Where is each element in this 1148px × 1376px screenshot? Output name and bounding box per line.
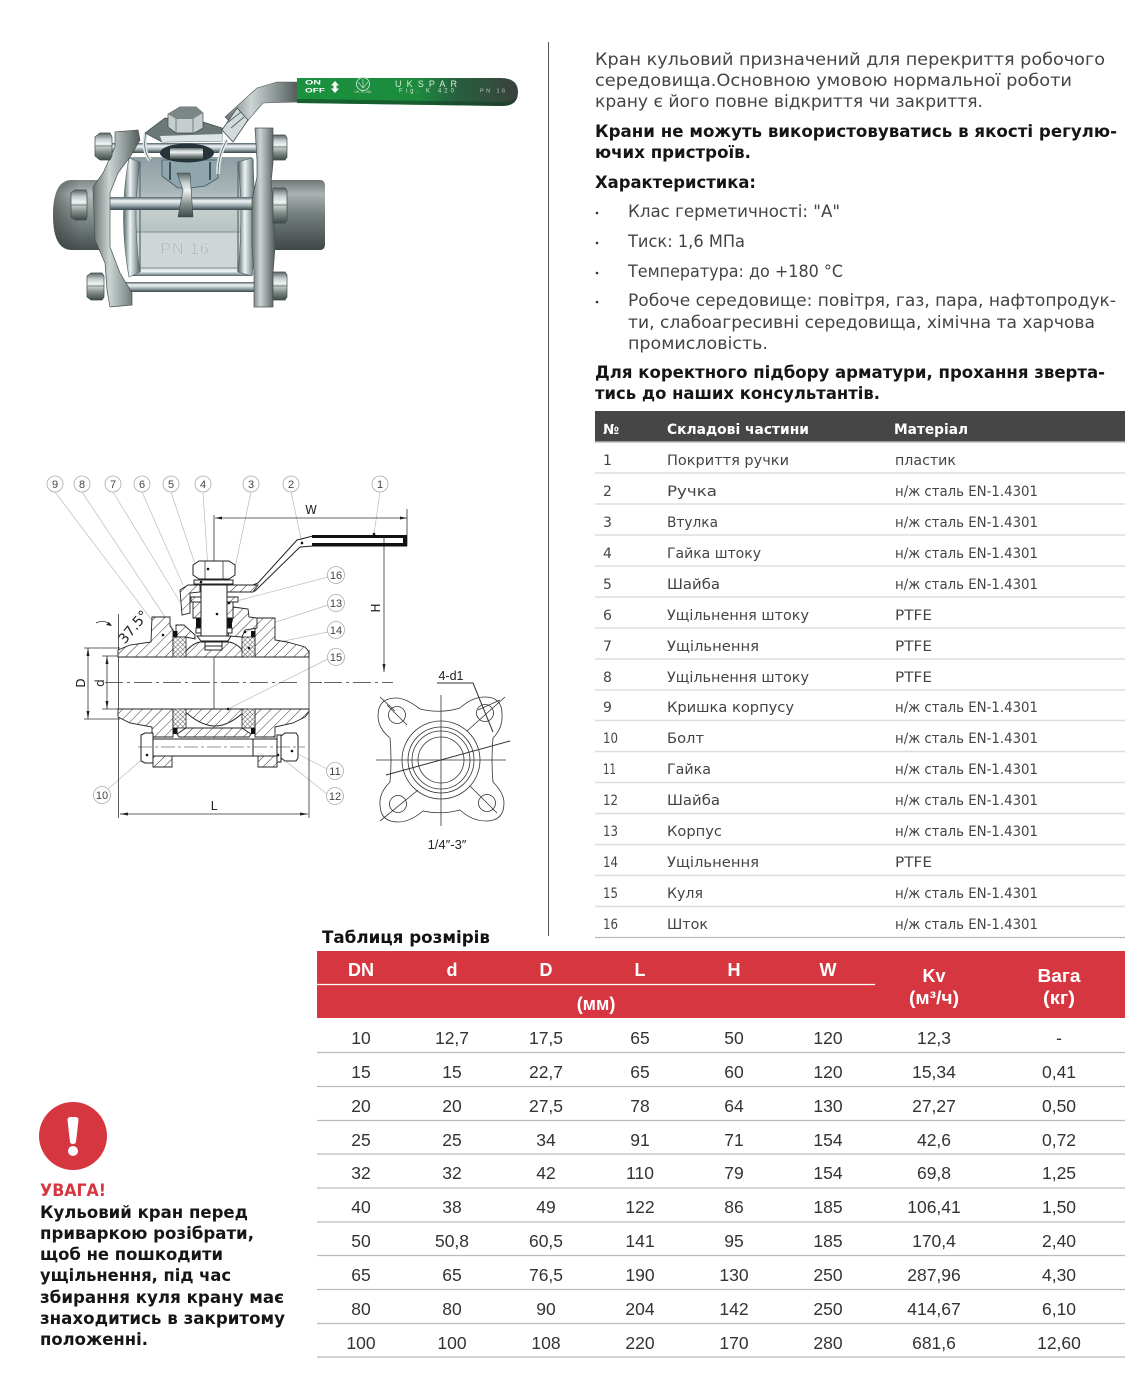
green handle grip [297,78,518,106]
row DN 40: 122 [625,1197,655,1217]
numbered balloons: 9 [52,479,58,491]
size range label: 1/4″-3″ [428,837,467,852]
row DN 15: 60 [724,1062,744,1082]
numbered balloons: 5 [168,479,174,491]
left flange [93,130,140,307]
size table title: Таблиця розмірів [322,928,490,948]
row DN 10: 12,3 [917,1028,951,1048]
body end rings [124,158,140,277]
numbered balloons: 10 [96,790,108,802]
retaining clip [177,173,193,217]
parts rows: 9 [603,700,612,716]
row DN 15 [317,1062,1125,1086]
row DN 10: 17,5 [529,1028,563,1048]
row DN 32: 1,25 [1042,1163,1076,1183]
row DN 25: 0,72 [1042,1130,1076,1150]
dimension arrows [86,516,407,816]
row DN 65: 287,96 [907,1265,961,1285]
numbered balloons: 6 [139,479,145,491]
row DN 50: 170,4 [912,1231,956,1251]
parts rows: 5 [603,577,612,593]
row DN 32: 69,8 [917,1163,951,1183]
row DN 10: 65 [630,1028,650,1048]
row DN 25: 71 [724,1130,744,1150]
row DN 32: 154 [813,1163,843,1183]
row DN 25: 91 [630,1130,650,1150]
parts rows: 10 [603,731,618,747]
green handle grip: OFF [305,88,325,94]
parts rows: Куля [667,886,703,902]
parts rows: н/ж сталь EN-1.4301 [895,762,1038,778]
row DN 25: 25 [351,1130,371,1150]
consultants note [595,363,1105,403]
row DN 25: 42,6 [917,1130,951,1150]
row DN 50: 185 [813,1231,843,1251]
row DN 80: 80 [351,1299,371,1319]
stem nut [168,107,203,133]
row DN 25: 34 [536,1130,556,1150]
row DN 25: 154 [813,1130,843,1150]
dimension labels: 37.5° [116,608,152,647]
size table header: d [446,960,458,980]
row DN 80: 6,10 [1042,1299,1076,1319]
parts rows: н/ж сталь EN-1.4301 [895,546,1038,562]
dimension labels: d [93,679,107,687]
dimension labels [74,503,383,813]
parts rows: 3 [603,515,612,531]
parts table header: Матеріал [894,422,968,438]
row DN 40 [317,1197,1125,1222]
row DN 65: 4,30 [1042,1265,1076,1285]
valve barrel: PN 16 [160,241,210,258]
row DN 10: - [1056,1028,1062,1048]
parts rows: Ущільнення [667,855,759,871]
parts table [595,411,1125,938]
flange end view [376,669,510,852]
parts rows: 16 [603,917,618,933]
parts rows: н/ж сталь EN-1.4301 [895,917,1038,933]
row DN 50: 50 [351,1231,371,1251]
row DN 32: 110 [626,1163,654,1183]
parts rows: Ущільнення штоку [667,608,809,624]
green handle grip: PN 16 [480,88,505,94]
row DN 25: 25 [442,1130,462,1150]
characteristics list: Температура: до +180 °C [627,262,843,282]
size table header: Kv [922,966,946,986]
flange axes [376,683,510,826]
row DN 80: 80 [442,1299,462,1319]
black handle sleeve [312,535,407,546]
parts rows: н/ж сталь EN-1.4301 [895,824,1038,840]
parts rows: н/ж сталь EN-1.4301 [895,793,1038,809]
green handle grip: UKSPAR [395,79,458,89]
row DN 40: 38 [442,1197,462,1217]
row DN 32: 79 [724,1163,744,1183]
parts rows: Болт [667,731,704,747]
row DN 15: 15 [351,1062,371,1082]
parts rows: Кришка корпусу [667,700,794,716]
regulating warning [595,122,1117,162]
row DN 50: 60,5 [529,1231,563,1251]
parts rows: 1 [603,453,612,469]
right pipe end [268,180,325,250]
parts rows: 8 [603,670,612,686]
ball valve product photo [53,78,518,307]
size table header: (мм) [577,994,615,1014]
parts rows: 15 [603,886,618,902]
characteristics list: Клас герметичності: "А" [628,202,840,222]
row DN 50: 95 [724,1231,744,1251]
row DN 80: 142 [719,1299,749,1319]
parts rows: 6 [603,608,612,624]
dimension lines [84,509,407,818]
size table [317,951,1125,1357]
parts rows: PTFE [895,608,932,624]
row DN 50: 141 [625,1231,655,1251]
parts rows: Корпус [667,824,722,840]
technical section drawing [47,476,407,818]
dimension labels: W [305,503,317,517]
regulating warning: ючих пристроїв. [595,143,751,162]
row DN 40: 40 [351,1197,371,1217]
parts rows: PTFE [895,670,932,686]
row DN 100: 100 [346,1333,376,1353]
row DN 20 [317,1096,1125,1120]
characteristics list: ти, слабоагресивні середовища, хімічна та харчова [628,313,1095,333]
valve barrel [128,157,254,276]
row DN 50: 2,40 [1042,1231,1076,1251]
seat packing [173,637,255,728]
warning text: приваркою розібрати, [40,1224,254,1243]
row DN 50: 50,8 [435,1231,469,1251]
flange bore circles [388,704,496,812]
warning text: збирання куля крану має [40,1288,284,1307]
row DN 80: 90 [536,1299,556,1319]
row DN 65: 65 [351,1265,371,1285]
row DN 100: 170 [719,1333,749,1353]
parts rows: 13 [603,824,618,840]
parts rows: Ущільнення штоку [667,670,809,686]
parts rows: н/ж сталь EN-1.4301 [895,886,1038,902]
row DN 15: 15,34 [912,1062,956,1082]
numbered balloons: 3 [248,479,254,491]
consultants note: тись до наших консультантів. [595,384,880,403]
parts rows: Ущільнення [667,639,759,655]
row DN 65: 76,5 [529,1265,563,1285]
row DN 15: 120 [813,1062,843,1082]
row DN 80: 204 [625,1299,655,1319]
warning text: щоб не пошкодити [40,1245,223,1264]
parts rows: 7 [603,639,612,655]
characteristics list: промисловість. [628,334,768,354]
parts rows: Шток [667,917,708,933]
characteristics list: Тиск: 1,6 МПа [627,232,745,252]
size table header: (м³/ч) [909,988,959,1008]
warning text [40,1203,285,1349]
size table header: D [540,960,552,980]
row DN 15: 65 [630,1062,650,1082]
bottom tie rod [118,282,258,292]
intro paragraph: середовища.Основною умовою нормальної роботи [595,71,1072,91]
handle clip [222,108,248,142]
warning text: положенні. [40,1330,148,1349]
row DN 10: 50 [724,1028,744,1048]
parts rows: н/ж сталь EN-1.4301 [895,515,1038,531]
leader dots [146,533,375,756]
hatched body sections [118,585,309,767]
flange outline [378,697,504,822]
numbered balloons: 7 [110,479,116,491]
row DN 20: 20 [351,1096,371,1116]
numbered balloons: 16 [330,570,342,582]
valve neck [162,160,218,188]
numbered balloons [47,476,388,804]
row DN 20: 0,50 [1042,1096,1076,1116]
leader lines [55,492,380,794]
parts rows: н/ж сталь EN-1.4301 [895,731,1038,747]
row DN 65: 130 [719,1265,749,1285]
row DN 65 [317,1265,1125,1290]
parts rows: Гайка штоку [667,546,761,562]
parts rows: Шайба [667,793,720,809]
warning text: знаходитись в закритому [40,1309,285,1328]
parts rows: н/ж сталь EN-1.4301 [895,484,1038,500]
nuts [71,133,287,300]
dimension labels: H [369,603,383,613]
row DN 10: 10 [351,1028,371,1048]
consultants note: Для коректного підбору арматури, прохання зверта- [595,363,1105,382]
locking plate hooks [145,133,227,174]
row DN 10 [317,1028,1125,1052]
row DN 20: 130 [813,1096,843,1116]
green handle grip: Fig. K 420 [399,88,455,94]
size table header: Вага [1038,966,1082,986]
row DN 32 [317,1163,1125,1188]
row DN 32: 32 [351,1163,371,1183]
size table header: DN [348,960,374,980]
numbered balloons: 15 [330,652,342,664]
size table header: W [820,960,836,980]
row DN 15: 15 [442,1062,462,1082]
row DN 40: 106,41 [907,1197,961,1217]
parts rows: 12 [603,793,618,809]
numbered balloons: 2 [288,479,294,491]
row DN 100: 12,60 [1037,1333,1081,1353]
row DN 80: 414,67 [907,1299,961,1319]
parts rows: Ручка [667,484,717,500]
steel handle arm [225,82,298,131]
row DN 10: 120 [813,1028,843,1048]
row DN 15: 22,7 [529,1062,563,1082]
characteristics heading: Характеристика: [595,173,756,192]
warning text: Кульовий кран перед [40,1203,248,1222]
parts table header: № [603,422,619,438]
size table header [317,951,1125,1018]
row DN 10: 12,7 [435,1028,469,1048]
row DN 65: 65 [442,1265,462,1285]
characteristics list [596,202,1116,354]
row DN 65: 250 [813,1265,843,1285]
row DN 40: 1,50 [1042,1197,1076,1217]
parts rows: н/ж сталь EN-1.4301 [895,700,1038,716]
green handle grip: UK.TR.061 [354,90,372,94]
parts rows: пластик [895,453,956,469]
parts rows: Шайба [667,577,720,593]
row DN 100: 280 [813,1333,843,1353]
numbered balloons: 12 [329,791,341,803]
parts rows: 11 [603,762,616,778]
row DN 50 [317,1231,1125,1256]
vertical divider [548,42,550,936]
row DN 32: 32 [442,1163,462,1183]
parts table header: Складові частини [667,422,809,438]
intro paragraph: Кран кульовий призначений для перекриття робочого [595,50,1105,70]
row DN 100: 220 [625,1333,655,1353]
dimension labels: L [211,799,218,813]
warning callout [39,1102,285,1349]
middle tie rod [108,197,256,210]
row DN 80: 250 [813,1299,843,1319]
black O-rings [173,618,256,734]
stem collar [160,144,214,162]
row DN 40: 86 [724,1197,744,1217]
numbered balloons: 4 [200,479,206,491]
row DN 32: 42 [536,1163,556,1183]
numbered balloons: 11 [329,766,341,778]
icon: exclamation mark [39,1102,107,1170]
row DN 25 [317,1130,1125,1154]
right flange [252,128,275,307]
parts rows: Покриття ручки [667,453,789,469]
row DN 20: 64 [724,1096,744,1116]
parts rows: Втулка [667,515,718,531]
parts rows: 2 [603,484,612,500]
handle outline [253,536,313,591]
size table header: H [728,960,740,980]
parts rows: Гайка [667,762,711,778]
parts rows: PTFE [895,639,932,655]
row DN 20: 27,27 [912,1096,956,1116]
parts rows [595,453,1125,938]
parts rows: н/ж сталь EN-1.4301 [895,577,1038,593]
hole callout: 4-d1 [438,669,464,683]
row DN 100 [317,1333,1125,1357]
top tie rod [112,143,278,153]
parts rows: 14 [603,855,618,871]
row DN 40: 49 [536,1197,556,1217]
row DN 20: 27,5 [529,1096,563,1116]
row DN 80 [317,1299,1125,1324]
row DN 20: 20 [442,1096,462,1116]
green handle grip: ON [305,80,322,86]
intro paragraph: крану є його повне відкриття чи закриття. [595,92,983,112]
numbered balloons: 1 [377,479,383,491]
row DN 100: 681,6 [912,1333,956,1353]
numbered balloons: 14 [330,625,342,637]
parts rows: 4 [603,546,612,562]
left pipe end [53,180,100,250]
size table header: L [634,960,646,980]
row DN 15: 0,41 [1042,1062,1076,1082]
parts table header [595,411,1125,442]
regulating warning: Крани не можуть використовуватись в якості регулю- [595,122,1117,141]
size table header: (кг) [1043,988,1075,1008]
intro paragraph [595,50,1105,112]
parts rows: PTFE [895,855,932,871]
row DN 65: 190 [625,1265,655,1285]
dimension labels: D [74,678,88,688]
row DN 100: 100 [437,1333,467,1353]
warning text: ущільнення, під час [40,1266,231,1285]
row DN 20: 78 [630,1096,650,1116]
warning heading: УВАГА! [40,1181,106,1201]
numbered balloons: 8 [79,479,85,491]
numbered balloons: 13 [330,598,342,610]
bolt and nuts [138,733,305,763]
locking plate [145,118,222,142]
characteristics list: Робоче середовище: повітря, газ, пара, нафтопродук- [628,291,1116,311]
stem and stem nut [193,561,235,650]
row DN 100: 108 [531,1333,561,1353]
row DN 40: 185 [813,1197,843,1217]
